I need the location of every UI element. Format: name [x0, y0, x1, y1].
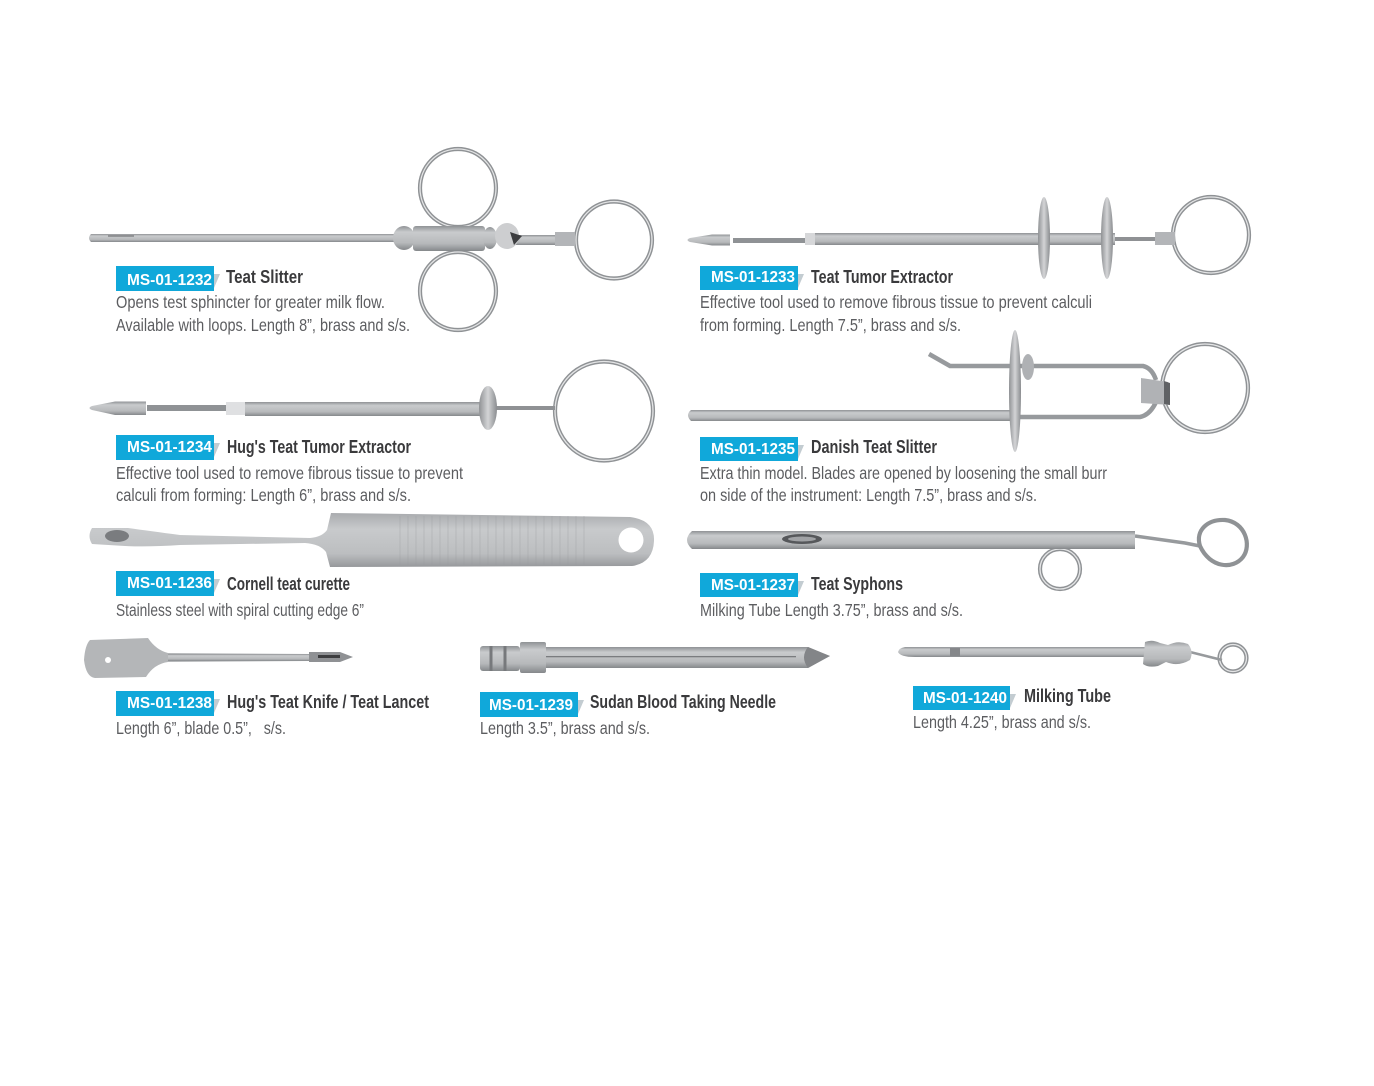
part number tag [480, 692, 584, 717]
name: Teat Tumor Extractor [811, 267, 953, 287]
part number tag: MS-01-1237 [711, 577, 795, 594]
name: Teat Syphons [811, 574, 903, 594]
name: Danish Teat Slitter [811, 437, 937, 457]
instrument: Teat Tumor Extractor [688, 197, 1249, 279]
name: Teat Slitter [226, 267, 303, 287]
part number tag [700, 437, 804, 461]
name: Cornell teat curette [227, 574, 350, 594]
description [700, 463, 1107, 505]
part number tag [116, 571, 220, 596]
product: Teat Syphons [687, 520, 1247, 620]
name: Hug's Teat Knife / Teat Lancet [227, 692, 429, 712]
instrument: Teat Syphons [687, 520, 1247, 589]
description: calculi from forming: Length 6”, brass and s/s. [116, 485, 411, 505]
description: Length 6”, blade 0.5”, s/s. [116, 718, 286, 738]
part number tag: MS-01-1235 [711, 441, 795, 458]
part number tag [700, 573, 804, 597]
instrument: Danish Teat Slitter [688, 330, 1248, 452]
description: Length 4.25”, brass and s/s. [913, 712, 1091, 732]
part number tag [116, 266, 220, 291]
description: on side of the instrument: Length 7.5”, brass and s/s. [700, 485, 1037, 505]
instrument: Cornell teat curette [90, 513, 654, 567]
product: Hug's Teat Tumor Extractor [90, 362, 653, 505]
product: Danish Teat Slitter [688, 330, 1248, 505]
instrument: Hug's Teat Knife [84, 638, 353, 678]
part number tag: MS-01-1236 [127, 575, 212, 592]
instrument: Hug's Teat Tumor Extractor [90, 362, 653, 460]
description: Extra thin model. Blades are opened by loosening the small burr [700, 463, 1107, 483]
product: Cornell teat curette [90, 513, 654, 620]
description: Length 3.5”, brass and s/s. [480, 718, 650, 738]
description [116, 292, 410, 335]
part number tag [913, 686, 1016, 710]
product: Teat Slitter [89, 149, 652, 335]
instrument: Milking Tube [898, 641, 1246, 672]
part number tag: MS-01-1232 [127, 272, 212, 289]
name: Hug's Teat Tumor Extractor [227, 437, 411, 457]
description: Milking Tube Length 3.75”, brass and s/s. [700, 600, 963, 620]
description: Available with loops. Length 8”, brass and s/s. [116, 315, 410, 335]
part number tag [116, 435, 220, 460]
product: Milking Tube [898, 641, 1246, 732]
description: Stainless steel with spiral cutting edge 6” [116, 600, 364, 620]
instrument: Teat Slitter [89, 149, 652, 330]
description: from forming. Length 7.5”, brass and s/s. [700, 315, 961, 335]
product: Hug's Teat Knife [84, 638, 429, 738]
description [700, 292, 1092, 335]
name: Sudan Blood Taking Needle [590, 692, 776, 712]
name: Milking Tube [1024, 686, 1111, 706]
description: Effective tool used to remove fibrous tissue to prevent [116, 463, 463, 483]
description: Effective tool used to remove fibrous tissue to prevent calculi [700, 292, 1092, 312]
part number tag: MS-01-1239 [489, 697, 573, 714]
part number tag [700, 266, 804, 290]
description [116, 463, 463, 505]
part number tag [116, 691, 220, 716]
part number tag: MS-01-1234 [127, 439, 212, 456]
part number tag: MS-01-1233 [711, 269, 795, 286]
description: Opens test sphincter for greater milk flow. [116, 292, 385, 312]
part number tag: MS-01-1240 [923, 690, 1007, 707]
product: Sudan Blood Taking Needle [480, 642, 830, 738]
part number tag: MS-01-1238 [127, 695, 212, 712]
instrument: Sudan Blood Taking Needle [480, 642, 830, 673]
product: Teat Tumor Extractor [688, 197, 1249, 335]
